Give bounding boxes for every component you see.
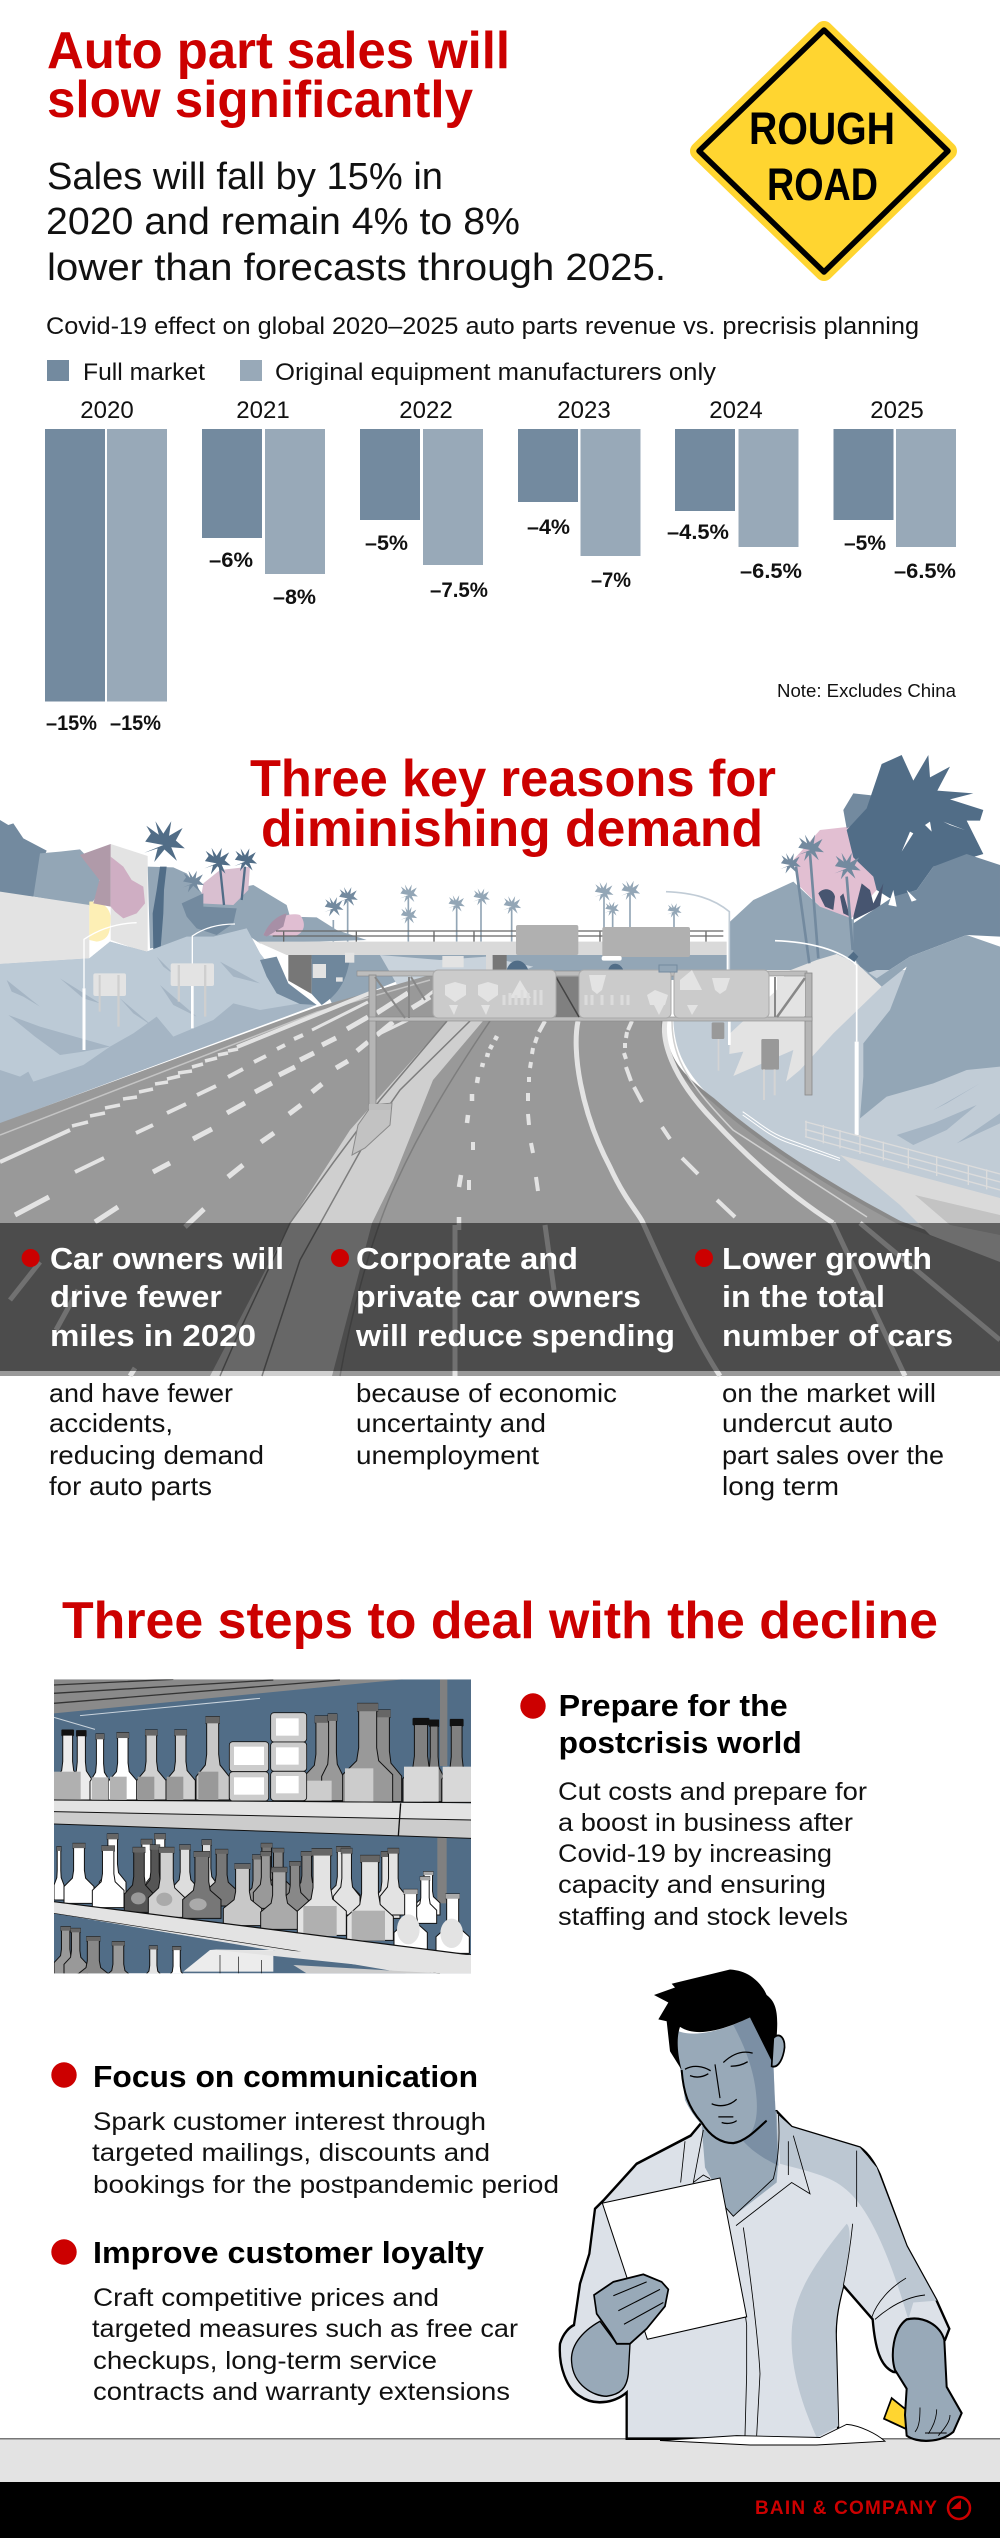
right shoulder strip [840,1155,1000,1262]
heading: three steps: Three steps to deal with the decline [62,1592,938,1650]
value labels: –15% [46,712,97,735]
year labels: 2020 [80,397,134,424]
heading: three key reasons [250,750,776,858]
card [884,2398,915,2429]
chart legend [47,359,716,386]
reason 2: will reduce spending [355,1318,675,1353]
value labels: –6.5% [894,560,956,583]
value labels: –6% [209,549,253,572]
subtitle [46,156,666,289]
value labels: –5% [365,532,408,555]
step 2: communication [51,2059,559,2199]
reason 2: because of economic [356,1378,617,1408]
step 2: communication: Spark customer interest through [93,2108,486,2136]
hair [654,1970,777,2070]
reason 1: drive fewer [50,1279,222,1314]
ear [772,2035,785,2067]
reason 1: miles in 2020 [50,1318,256,1353]
reason 3: Lower growth [722,1241,932,1276]
icon: rough road sign: ROAD [767,159,878,210]
reason 1: Car owners will [50,1241,284,1276]
reason 2: Corporate and [356,1241,578,1276]
right hillside, trees and palms [666,755,1000,1223]
value labels: –15% [110,712,161,735]
subtitle: Sales will fall by 15% in [47,156,443,198]
icon: rough road sign: ROUGH [749,103,895,154]
step 2: communication: bookings for the postpandemic period [93,2171,559,2199]
right fence [743,1112,1000,1190]
step 1: prepare [520,1688,867,1931]
upper row bottles [54,1703,472,1803]
bars: full market [45,429,894,702]
lane markings in the band area [10,1223,1000,1376]
paper held in hand [602,2178,747,2339]
reason 2: unemployment [356,1440,540,1470]
left road signs [93,963,214,1027]
chart note: Note: Excludes China [777,680,957,701]
reason 2: uncertainty and [356,1408,546,1438]
step 1: prepare: a boost in business after [558,1809,853,1837]
lane markings [0,990,867,1230]
reason 1: for auto parts [49,1471,212,1501]
value labels: –6.5% [740,560,802,583]
step 1: prepare: capacity and ensuring [558,1871,826,1899]
heading: three key reasons: Three key reasons for [250,750,776,808]
reason 2 [331,1241,675,1470]
shirt shading [778,2115,937,2319]
step 2: communication: targeted mailings, discounts and [92,2139,490,2167]
title: Auto part sales will [47,22,510,80]
value labels [46,516,956,735]
title [47,22,510,129]
subtitle: lower than forecasts through 2025. [47,247,666,289]
face lines [685,2052,753,2123]
left hand [594,2274,668,2344]
head [676,2018,775,2143]
reason 1: accidents, [49,1408,173,1438]
step 3: loyalty: checkups, long-term service [93,2347,437,2375]
subtitle: 2020 and remain 4% to 8% [46,201,520,243]
right forearm and hand [893,2319,962,2441]
left street lights [84,923,235,1050]
step 3: loyalty [51,2235,518,2406]
reason 2: private car owners [356,1279,641,1314]
reason 3: long term [722,1471,839,1501]
median [210,1021,483,1376]
table surface [0,2438,1000,2482]
papers on table [660,2424,885,2445]
reason 3: in the total [722,1279,885,1314]
reason 1: and have fewer [49,1378,233,1408]
year labels: 2023 [557,397,611,424]
illustration: store shelves [54,1679,472,1992]
icon: rough road sign [699,30,948,272]
reason 1: reducing demand [49,1440,264,1470]
lower shelf [54,1902,471,1973]
value labels: –4.5% [667,521,729,544]
reason 3: undercut auto [722,1408,893,1438]
step 3: loyalty: targeted measures such as free car [92,2315,518,2343]
value labels: –7% [591,569,631,592]
step 1: prepare: staffing and stock levels [558,1903,848,1931]
left hillside and buildings [0,820,367,1123]
step 3: loyalty: Improve customer loyalty [93,2235,485,2270]
reason 3 [695,1241,953,1501]
reason 3: number of cars [722,1318,953,1353]
reason 3: on the market will [722,1378,936,1408]
bottom row bottles [54,1926,184,1974]
step 1: prepare: Covid-19 by increasing [558,1840,832,1868]
road surface [0,975,1000,1376]
chart legend: Full market [83,359,205,386]
cans [229,1713,307,1801]
year labels: 2022 [399,397,453,424]
collar and placket lines [681,2115,925,2436]
right street lights [851,1042,863,1135]
year labels: 2021 [236,397,290,424]
step 1: prepare: Prepare for the [559,1688,788,1723]
reason 1 [22,1241,284,1501]
left forearm [571,2321,630,2396]
middle row bottles [54,1834,469,1953]
heading: three key reasons: diminishing demand [261,800,763,858]
title: slow significantly [47,71,473,129]
step 3: loyalty: contracts and warranty extensions [93,2378,510,2406]
neck and chest [702,2111,778,2216]
value labels: –4% [527,516,570,539]
illustration: man reading a paper [560,1970,962,2445]
footer bar [0,2482,1000,2538]
chart caption: Covid-19 effect on global 2020–2025 auto parts revenue vs. precrisis planning [46,313,919,340]
value labels: –7.5% [430,579,488,602]
upper shelf [54,1800,471,1838]
step 3: loyalty: Craft competitive prices and [93,2284,439,2312]
chart legend: Original equipment manufacturers only [275,359,716,386]
year labels [80,397,924,424]
bar chart [45,397,956,735]
highway gantry and overhead signs [357,965,812,1110]
value labels: –5% [844,532,886,555]
overpass [257,881,727,1007]
top shelf edge [54,1679,403,1713]
shirt [560,2111,949,2439]
right side signs [712,1022,779,1100]
step 1: prepare: Cut costs and prepare for [558,1778,867,1806]
year labels: 2024 [709,397,763,424]
year labels: 2025 [870,397,924,424]
step 1: prepare: postcrisis world [559,1725,802,1760]
reason 3: part sales over the [722,1440,944,1470]
logo: Bain and Company: BAIN & COMPANY [755,2498,937,2519]
dark caption band [0,1223,1000,1371]
illustration: empty highway [0,755,1000,1376]
step 2: communication: Focus on communication [93,2059,478,2094]
bars: original equipment manufacturers [107,429,956,702]
value labels: –8% [273,586,316,609]
